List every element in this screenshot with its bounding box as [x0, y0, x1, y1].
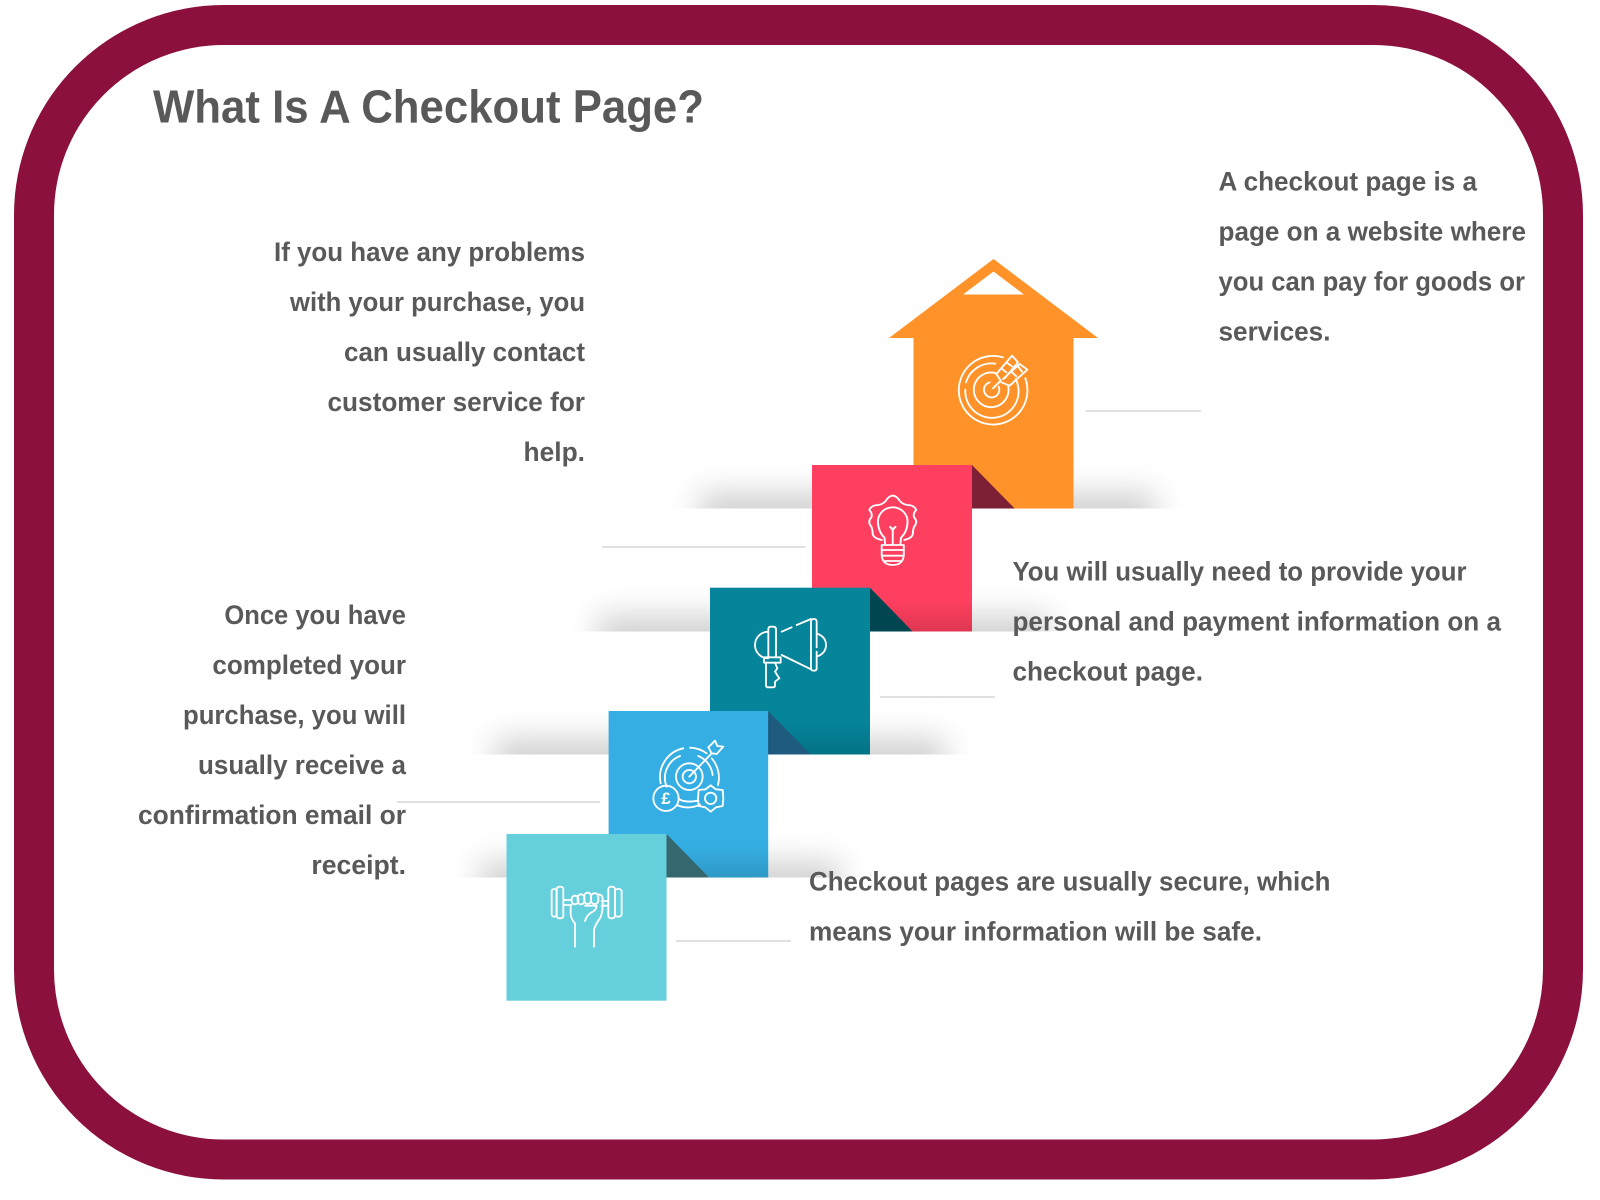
- text block: confirmation email: usually receive a: [198, 750, 407, 780]
- text block: customer service help: can usually contact: [344, 337, 585, 367]
- connector lines: [397, 411, 1201, 941]
- panel: red step: [812, 465, 1015, 632]
- text block: customer service help: with your purchase, you: [289, 287, 585, 317]
- panel: orange house step: [889, 259, 1098, 508]
- icon: target with feathered arrow: [959, 356, 1027, 425]
- text block: what a checkout page is: A checkout page is a: [1218, 166, 1478, 196]
- text block: secure checkout: Checkout pages are usually secure, which: [809, 867, 1330, 897]
- text block: confirmation email: confirmation email or: [138, 800, 406, 830]
- text block: confirmation email: receipt.: [311, 850, 406, 880]
- text block: customer service help: [274, 237, 585, 467]
- panel: cyan step: [506, 834, 709, 1001]
- text block: what a checkout page is: [1218, 166, 1526, 346]
- panel: blue step: [609, 711, 811, 878]
- text block: secure checkout: means your information will be safe.: [809, 917, 1262, 947]
- text block: confirmation email: purchase, you will: [183, 700, 406, 730]
- text block: confirmation email: [138, 600, 407, 880]
- text block: secure checkout: [809, 867, 1330, 947]
- icon: megaphone: [755, 619, 826, 687]
- text block: confirmation email: Once you have: [224, 600, 406, 630]
- text block: personal and payment information: You will usually need to provide your: [1012, 557, 1467, 587]
- text block: what a checkout page is: you can pay for goods or: [1218, 266, 1525, 296]
- panel: teal step: [710, 588, 913, 754]
- text block: personal and payment information: [1012, 557, 1502, 687]
- text block: personal and payment information: checkout page.: [1012, 657, 1203, 687]
- text block: what a checkout page is: services.: [1218, 316, 1330, 346]
- text block: confirmation email: completed your: [212, 650, 406, 680]
- floor shadows behind the staircase: [480, 492, 1155, 917]
- text block: what a checkout page is: page on a website where: [1218, 216, 1526, 246]
- icon: gear light bulb: [869, 496, 916, 565]
- title: What Is A Checkout Page?: [153, 80, 704, 132]
- icon: target with coin and gear: £: [661, 789, 671, 808]
- icon: target with coin and gear: [653, 741, 723, 812]
- text block: customer service help: If you have any problems: [274, 237, 585, 267]
- text block: customer service help: customer service for: [328, 387, 585, 417]
- text block: customer service help: help.: [524, 437, 585, 467]
- icon: hand lifting dumbbell: [552, 887, 622, 947]
- text block: personal and payment information: personal and payment information on a: [1012, 607, 1502, 637]
